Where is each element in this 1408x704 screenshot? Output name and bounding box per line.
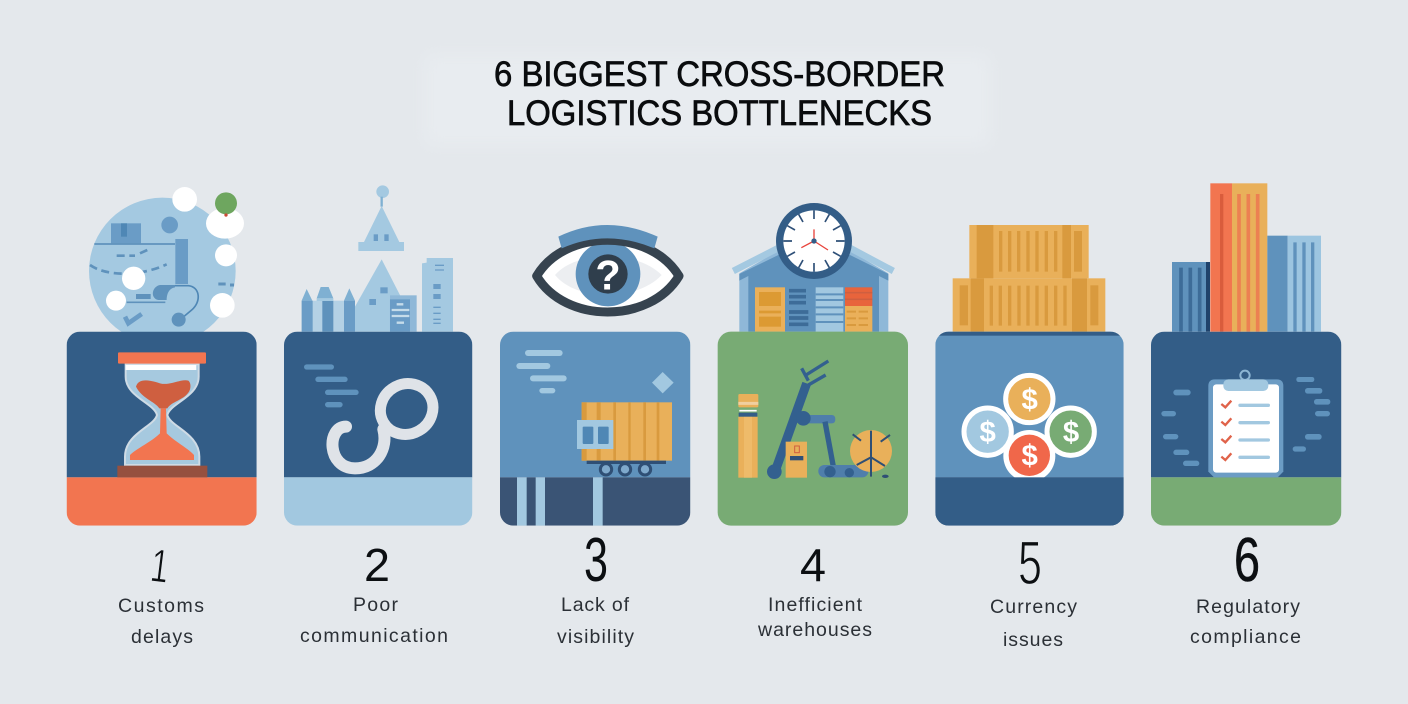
icon: tall buildings	[1172, 183, 1321, 332]
item 3: number and label: visibility	[557, 626, 634, 648]
icon: globe with route map	[89, 187, 244, 344]
title	[494, 54, 945, 133]
icon: warehouse equipment	[738, 361, 892, 479]
icon: currency coins: $	[980, 416, 996, 449]
icon: cargo container truck	[516, 350, 674, 475]
item 3: number and label: Lack of	[561, 594, 630, 616]
icon: currency coins: $	[1063, 416, 1079, 449]
title: 6 BIGGEST CROSS-BORDER	[494, 54, 945, 94]
item 6: number and label: compliance	[1190, 626, 1301, 648]
item 4: number and label	[757, 539, 872, 641]
icon: currency coins: $	[1022, 440, 1038, 473]
icon: broken chain link	[304, 364, 442, 468]
item 2: number and label	[300, 539, 448, 647]
icon: compliance clipboard	[1161, 371, 1330, 477]
panel: customs delays	[67, 187, 257, 526]
item 1: number and label: Customs	[118, 595, 204, 617]
item 2: number and label: Poor	[353, 594, 398, 616]
item 5: number and label	[990, 529, 1077, 651]
item 4: number and label: warehouses	[757, 619, 872, 641]
icon: eye with question mark: ?	[595, 252, 621, 298]
panel: poor communication	[284, 185, 472, 526]
icon: hourglass	[117, 352, 207, 477]
item 4: number and label: Inefficient	[768, 594, 863, 616]
item 2: number and label: communication	[300, 625, 448, 647]
card: regulatory compliance	[1151, 332, 1341, 526]
item 1: number and label	[118, 538, 204, 648]
item 5: number and label: 5	[1018, 529, 1042, 597]
card: lack of visibility	[500, 332, 690, 526]
panel: currency issues	[935, 225, 1124, 526]
icon: currency coins	[935, 375, 1124, 526]
panel: lack of visibility	[500, 225, 690, 526]
panel: regulatory compliance	[1151, 183, 1341, 526]
card: inefficient warehouses	[718, 332, 908, 526]
item 6: number and label: Regulatory	[1196, 596, 1300, 618]
item 1: number and label: 1	[148, 538, 172, 593]
title: LOGISTICS BOTTLENECKS	[507, 93, 932, 133]
item 6: number and label: 6	[1234, 526, 1260, 595]
card: poor communication	[284, 332, 472, 526]
item 3: number and label	[557, 526, 634, 648]
icon: city skyline with tower	[302, 185, 453, 332]
card: currency issues	[935, 332, 1124, 526]
card: customs delays	[67, 332, 257, 526]
icon: eye with question mark	[537, 225, 679, 312]
icon: currency coins: $	[1022, 383, 1038, 416]
item 1: number and label: delays	[131, 626, 193, 648]
icon: stacked shipping containers	[953, 225, 1105, 332]
item 3: number and label: 3	[584, 526, 608, 595]
item 2: number and label: 2	[364, 539, 390, 591]
item 5: number and label: issues	[1003, 629, 1063, 651]
icon: warehouse with clock	[733, 203, 893, 332]
panel: inefficient warehouses	[718, 203, 908, 526]
item 4: number and label: 4	[800, 539, 826, 591]
item 6: number and label	[1190, 526, 1301, 648]
item 5: number and label: Currency	[990, 596, 1077, 618]
